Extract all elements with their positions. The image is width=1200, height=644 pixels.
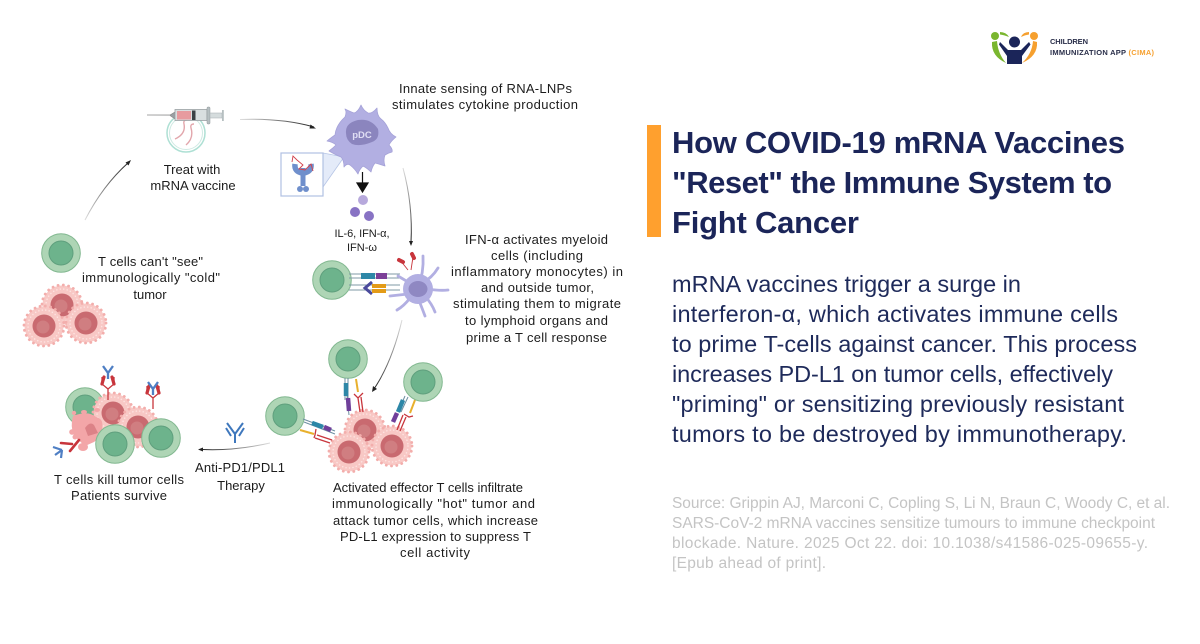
label: activated effector T cells: attack tumor cells, which increase	[333, 513, 538, 528]
label: activated effector T cells: cell activity	[400, 545, 470, 560]
logo subtitle: IMMUNIZATION APP (CIMA)	[1050, 48, 1154, 57]
label: cold tumor: tumor	[133, 287, 167, 302]
activated T cells attacking hot tumor	[266, 340, 442, 472]
label: IFN-alpha activation: IFN-α activates myeloid	[465, 232, 608, 247]
label: IFN-alpha activation: and outside tumor,	[481, 280, 594, 295]
label: anti-PD1/PDL1 therapy: Anti-PD1/PDL1	[195, 460, 285, 475]
label: anti-PD1/PDL1 therapy: Therapy	[217, 478, 265, 493]
label: innate sensing: Innate sensing of RNA-LNPs	[399, 81, 572, 96]
arrow: pDC to myeloid cell	[403, 168, 413, 246]
body text: increases PD-L1 on tumor cells, effectively	[672, 361, 1113, 387]
receptor pairs	[300, 378, 415, 443]
label: treat with mRNA vaccine	[150, 162, 236, 193]
label: innate sensing	[392, 81, 578, 112]
arrow: cytokine release	[357, 172, 368, 192]
arrow: tumor to vaccine	[85, 160, 131, 220]
label: T cells kill tumor cells: Patients survive	[71, 488, 167, 503]
label: innate sensing: stimulates cytokine production	[392, 97, 578, 112]
inset: antibody and RNA	[281, 153, 344, 196]
pDC cell: pDC	[352, 130, 372, 141]
accent bar	[647, 125, 661, 237]
label: cytokines: IFN-ω	[347, 242, 377, 254]
checkpoint antibodies	[53, 366, 159, 458]
label: IFN-alpha activation: prime a T cell response	[466, 330, 607, 345]
body text	[672, 271, 1137, 447]
cytokines	[350, 195, 374, 221]
title: "Reset" the Immune System to	[672, 165, 1112, 200]
label: IFN-alpha activation: inflammatory monocytes) in	[451, 264, 623, 279]
label: cytokines	[334, 228, 390, 254]
logo icon	[991, 32, 1038, 64]
source citation: Source: Grippin AJ, Marconi C, Copling S, Li N, Braun C, Woody C, et al.	[672, 495, 1170, 512]
label: T cells kill tumor cells	[54, 472, 184, 503]
T cells killing tumor cells	[53, 366, 180, 463]
label: IFN-alpha activation: to lymphoid organs and	[465, 313, 608, 328]
logo: Children Immunization App	[991, 32, 1088, 64]
label: cold tumor	[82, 254, 220, 302]
label: activated effector T cells: PD-L1 expression to suppress T	[340, 529, 531, 544]
label: T cells kill tumor cells: T cells kill tumor cells	[54, 472, 184, 487]
body text: mRNA vaccines trigger a surge in	[672, 271, 1021, 297]
cold tumor with T cell	[24, 234, 106, 346]
label: IFN-alpha activation: cells (including	[491, 248, 583, 263]
label: IFN-alpha activation	[451, 232, 623, 345]
label: activated effector T cells: Activated effector T cells infiltrate	[333, 480, 523, 495]
effector T cells	[266, 340, 442, 435]
label: activated effector T cells: immunologically "hot" tumor and	[332, 496, 535, 511]
hot tumor cells	[329, 410, 412, 472]
body text: to prime T-cells against cancer. This process	[672, 331, 1137, 357]
label: anti-PD1/PDL1 therapy	[195, 460, 285, 493]
icon: syringe and mRNA vaccine	[147, 107, 224, 152]
body text: interferon-α, which activates immune cells	[672, 301, 1118, 327]
label: treat with mRNA vaccine: mRNA vaccine	[150, 178, 236, 193]
label: cold tumor: immunologically "cold"	[82, 270, 220, 285]
title: How COVID-19 mRNA Vaccines	[672, 125, 1125, 160]
body text: tumors to be destroyed by immunotherapy.	[672, 421, 1127, 447]
label: treat with mRNA vaccine: Treat with	[164, 162, 220, 177]
label: cytokines: IL-6, IFN-α,	[334, 228, 390, 240]
source citation	[672, 495, 1170, 572]
T cell and myeloid cell interaction	[313, 254, 448, 316]
label: cold tumor: T cells can't "see"	[98, 254, 203, 269]
source citation: blockade. Nature. 2025 Oct 22. doi: 10.1038/s41586-025-09655-y.	[672, 535, 1148, 552]
pDC cell	[327, 105, 396, 174]
icon: anti-PD1 antibody	[226, 423, 244, 443]
source citation: SARS-CoV-2 mRNA vaccines sensitize tumours to immune checkpoint	[672, 515, 1156, 532]
logo text: CHILDREN	[1050, 37, 1088, 46]
arrow: therapy	[198, 443, 270, 452]
arrow: vaccine to pDC	[240, 119, 316, 128]
source citation: [Epub ahead of print].	[672, 555, 826, 572]
title	[672, 125, 1125, 240]
arrow: myeloid cell to tumor	[372, 320, 402, 392]
label: IFN-alpha activation: stimulating them to migrate	[453, 296, 621, 311]
body text: "priming" or sensitizing previously resistant	[672, 391, 1124, 417]
title: Fight Cancer	[672, 205, 859, 240]
label: activated effector T cells	[332, 480, 538, 560]
